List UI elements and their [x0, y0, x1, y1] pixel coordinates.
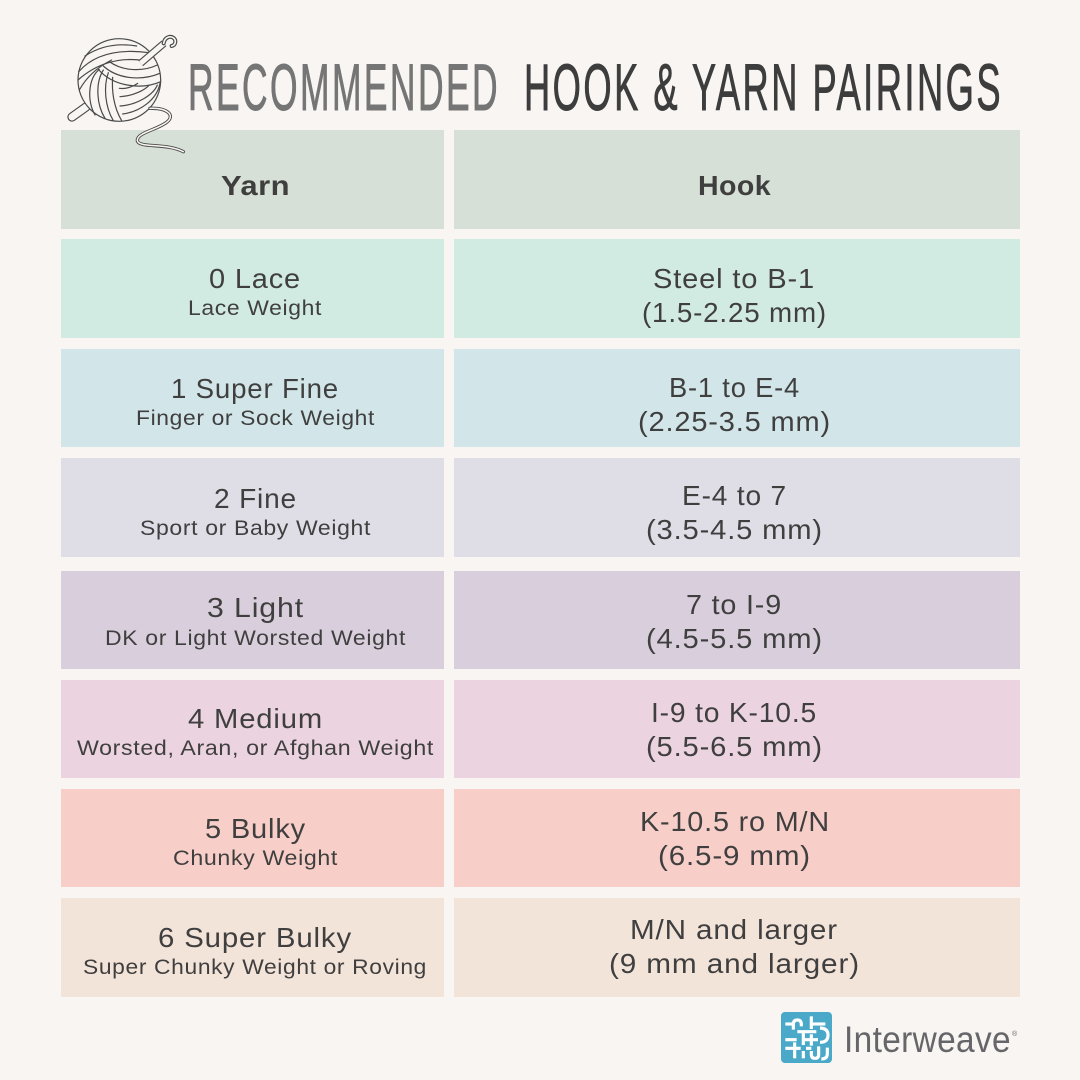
logo: Interweave	[781, 1012, 1018, 1063]
hook cell: steel to B-1: Steel to B-1	[653, 263, 815, 294]
yarn cell: 5 bulky: Chunky Weight	[173, 846, 338, 870]
icon: woven square	[781, 1012, 832, 1063]
row: 0 lace	[61, 239, 1020, 338]
row: 2 fine	[61, 458, 1020, 557]
yarn cell: 3 light	[61, 571, 444, 669]
header cell: yarn: Yarn	[221, 170, 290, 201]
table header row	[61, 130, 1020, 229]
title: RECOMMENDED	[188, 50, 500, 124]
yarn cell: 1 super fine: Finger or Sock Weight	[136, 406, 375, 430]
yarn cell: 2 fine	[61, 458, 444, 557]
hook cell: 7 to I-9	[454, 571, 1020, 669]
row: 4 medium	[61, 680, 1020, 778]
yarn cell: 4 medium: 4 Medium	[188, 703, 323, 734]
row: 6 super bulky	[61, 898, 1020, 997]
hook cell: M/N and larger	[454, 898, 1020, 997]
yarn cell: 2 fine: 2 Fine	[214, 483, 297, 514]
hook cell: I-9 to K-10.5	[454, 680, 1020, 778]
yarn cell: 0 lace: 0 Lace	[209, 263, 301, 294]
header cell: hook	[454, 130, 1020, 229]
hook cell: E-4 to 7: (3.5-4.5 mm)	[646, 514, 823, 545]
hook cell: I-9 to K-10.5: (5.5-6.5 mm)	[646, 731, 823, 762]
yarn cell: 3 light: DK or Light Worsted Weight	[105, 626, 406, 650]
hook cell: E-4 to 7	[454, 458, 1020, 557]
row: 3 light	[61, 571, 1020, 669]
yarn cell: 5 bulky: 5 Bulky	[205, 813, 306, 844]
hook cell: 7 to I-9: (4.5-5.5 mm)	[646, 623, 823, 654]
row: 1 super fine	[61, 349, 1020, 447]
yarn cell: 4 medium	[61, 680, 444, 778]
yarn cell: 0 lace	[61, 239, 444, 338]
yarn cell: 1 super fine	[61, 349, 444, 447]
hook cell: B-1 to E-4: B-1 to E-4	[669, 372, 800, 403]
hook cell: M/N and larger: (9 mm and larger)	[609, 948, 860, 979]
hook cell: I-9 to K-10.5: I-9 to K-10.5	[651, 697, 817, 728]
hook cell: 7 to I-9: 7 to I-9	[686, 589, 782, 620]
yarn cell: 6 super bulky: 6 Super Bulky	[158, 922, 352, 953]
yarn cell: 3 light: 3 Light	[207, 592, 304, 623]
yarn cell: 0 lace: Lace Weight	[188, 296, 322, 320]
yarn cell: 1 super fine: 1 Super Fine	[171, 373, 339, 404]
wordmark: Interweave	[844, 1019, 1011, 1060]
yarn cell: 5 bulky	[61, 789, 444, 887]
yarn cell: 6 super bulky: Super Chunky Weight or Roving	[83, 955, 427, 979]
hook cell: B-1 to E-4	[454, 349, 1020, 447]
hook cell: B-1 to E-4: (2.25-3.5 mm)	[638, 406, 831, 437]
hook cell: K-10.5 ro M/N: (6.5-9 mm)	[658, 840, 811, 871]
hook cell: M/N and larger: M/N and larger	[630, 914, 838, 945]
row: 5 bulky	[61, 789, 1020, 887]
yarn cell: 2 fine: Sport or Baby Weight	[140, 516, 371, 540]
header cell: yarn	[61, 130, 444, 229]
hook cell: E-4 to 7: E-4 to 7	[682, 480, 787, 511]
hook cell: K-10.5 ro M/N: K-10.5 ro M/N	[640, 806, 830, 837]
header cell: hook: Hook	[698, 170, 771, 201]
hook cell: K-10.5 ro M/N	[454, 789, 1020, 887]
yarn cell: 4 medium: Worsted, Aran, or Afghan Weight	[77, 736, 434, 760]
icon: yarn ball with crochet hook	[72, 37, 183, 152]
registered mark: ®	[1012, 1030, 1018, 1038]
yarn cell: 6 super bulky	[61, 898, 444, 997]
hook cell: steel to B-1	[454, 239, 1020, 338]
hook cell: steel to B-1: (1.5-2.25 mm)	[642, 297, 827, 328]
